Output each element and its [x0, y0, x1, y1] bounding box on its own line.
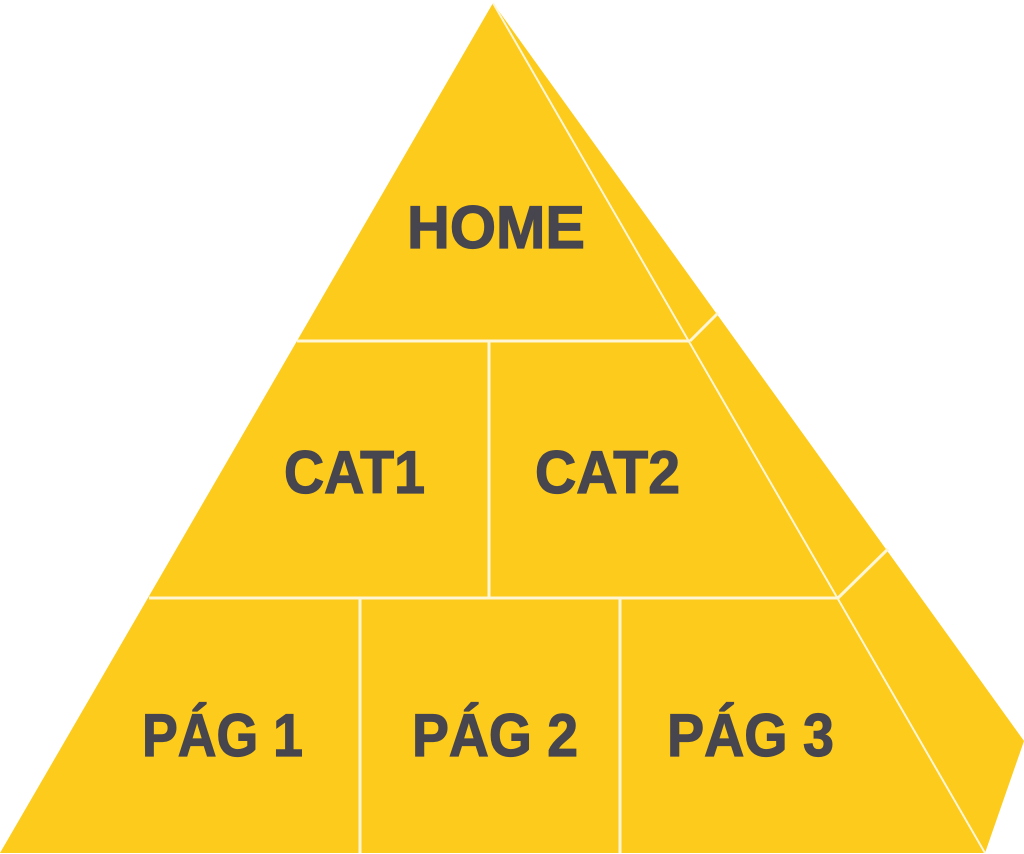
label: HOME: HOME	[407, 194, 585, 261]
label: PÁG 1: PÁG 1	[142, 702, 303, 769]
label: CAT1: CAT1	[284, 439, 425, 506]
label: PÁG 3: PÁG 3	[667, 702, 834, 769]
label: CAT2: CAT2	[535, 439, 680, 506]
label: PÁG 2: PÁG 2	[412, 702, 578, 769]
